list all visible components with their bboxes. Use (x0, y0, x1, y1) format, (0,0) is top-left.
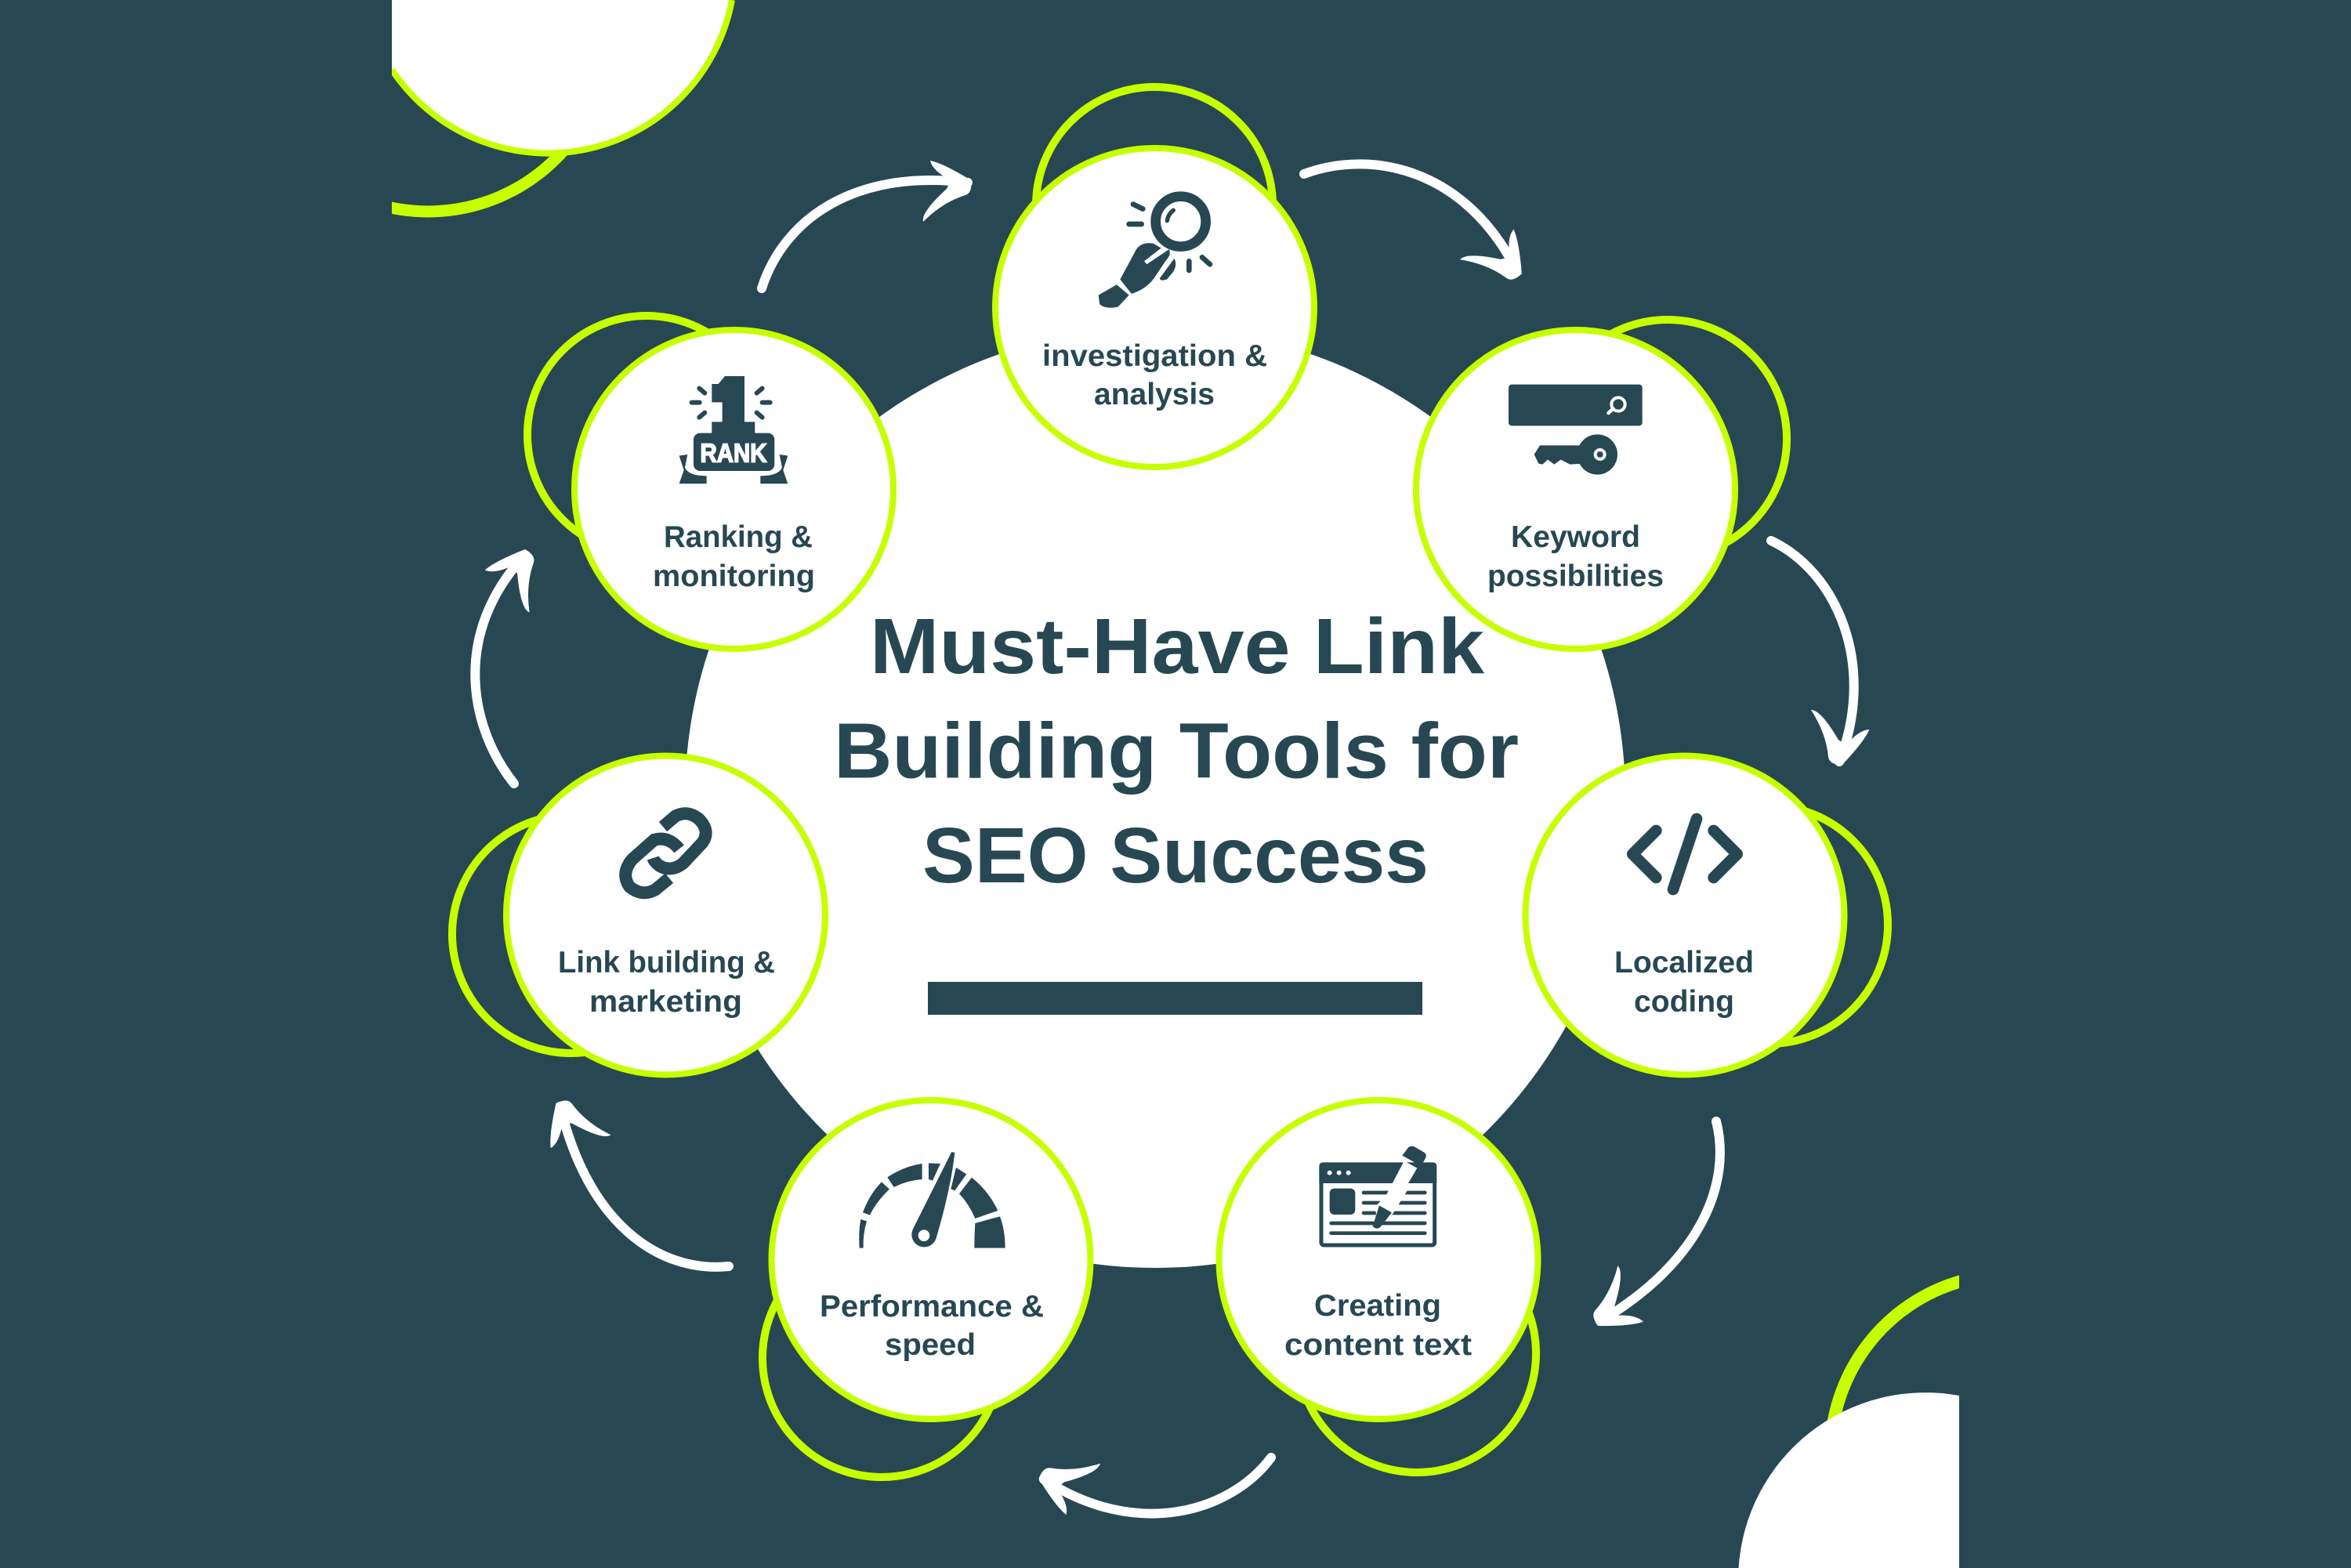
label: ranking & monitoring: Ranking & (664, 520, 813, 554)
label: link building & marketing: marketing (589, 985, 742, 1019)
decoration: top-left circle (384, 0, 732, 212)
arrow: link building to ranking (475, 538, 559, 784)
title: SEO Success (922, 812, 1429, 900)
label: investigation & analysis (1042, 339, 1267, 411)
arrow: creating to performance (1030, 1442, 1271, 1518)
label: creating content text: content text (1284, 1328, 1472, 1362)
label: creating content text (1284, 1289, 1472, 1362)
label: link building & marketing (558, 946, 775, 1019)
panel: investigation & analysis (995, 87, 1314, 467)
label: localized coding: Localized (1614, 946, 1754, 980)
label: localized coding: coding (1634, 985, 1734, 1019)
label: localized coding (1614, 946, 1754, 1019)
icon: speedometer gauge (859, 1152, 1005, 1248)
arrow: performance to link building (538, 1089, 729, 1267)
panel: creating content text (1219, 1100, 1538, 1472)
panel: keyword possibilities (1416, 320, 1787, 649)
label: keyword possibilities: possibilities (1487, 559, 1664, 593)
title: Building Tools for (834, 707, 1519, 795)
title underline bar (928, 982, 1422, 1015)
icon: chain link (625, 813, 706, 893)
panel: ranking & monitoring (527, 316, 893, 649)
arrow: investigation to keyword (1304, 164, 1538, 299)
label: keyword possibilities: Keyword (1511, 520, 1640, 554)
panel: link building & marketing (452, 755, 825, 1075)
icon: rank number one (679, 376, 788, 483)
title: Must-Have Link (870, 603, 1484, 690)
central white circle (685, 328, 1625, 1268)
label: ranking & monitoring: monitoring (653, 559, 815, 593)
decoration: bottom-right circle (1738, 1280, 1967, 1568)
icon: search bar and key (1509, 385, 1643, 475)
icon: code brackets (1632, 819, 1737, 889)
label: performance & speed: speed (885, 1328, 976, 1362)
panel: performance & speed (763, 1100, 1091, 1477)
icon: hand holding magnifier (1099, 197, 1210, 308)
arrow: ranking to investigation (762, 161, 971, 288)
label: investigation & analysis: analysis (1094, 378, 1215, 411)
icon: web page and pencil (1319, 1146, 1436, 1245)
label: performance & speed (820, 1290, 1044, 1362)
label: ranking & monitoring (653, 520, 815, 593)
arrow: keyword to localized (1771, 541, 1871, 770)
title (834, 603, 1519, 900)
icon: rank number one: RANK (700, 439, 766, 468)
arrow: localized to creating (1577, 1121, 1720, 1343)
label: performance & speed: Performance & (820, 1290, 1044, 1324)
label: creating content text: Creating (1314, 1289, 1441, 1323)
label: keyword possibilities (1487, 520, 1664, 593)
label: investigation & analysis: investigation & (1042, 339, 1267, 373)
label: link building & marketing: Link building & (558, 946, 775, 980)
panel: localized coding (1525, 755, 1888, 1075)
